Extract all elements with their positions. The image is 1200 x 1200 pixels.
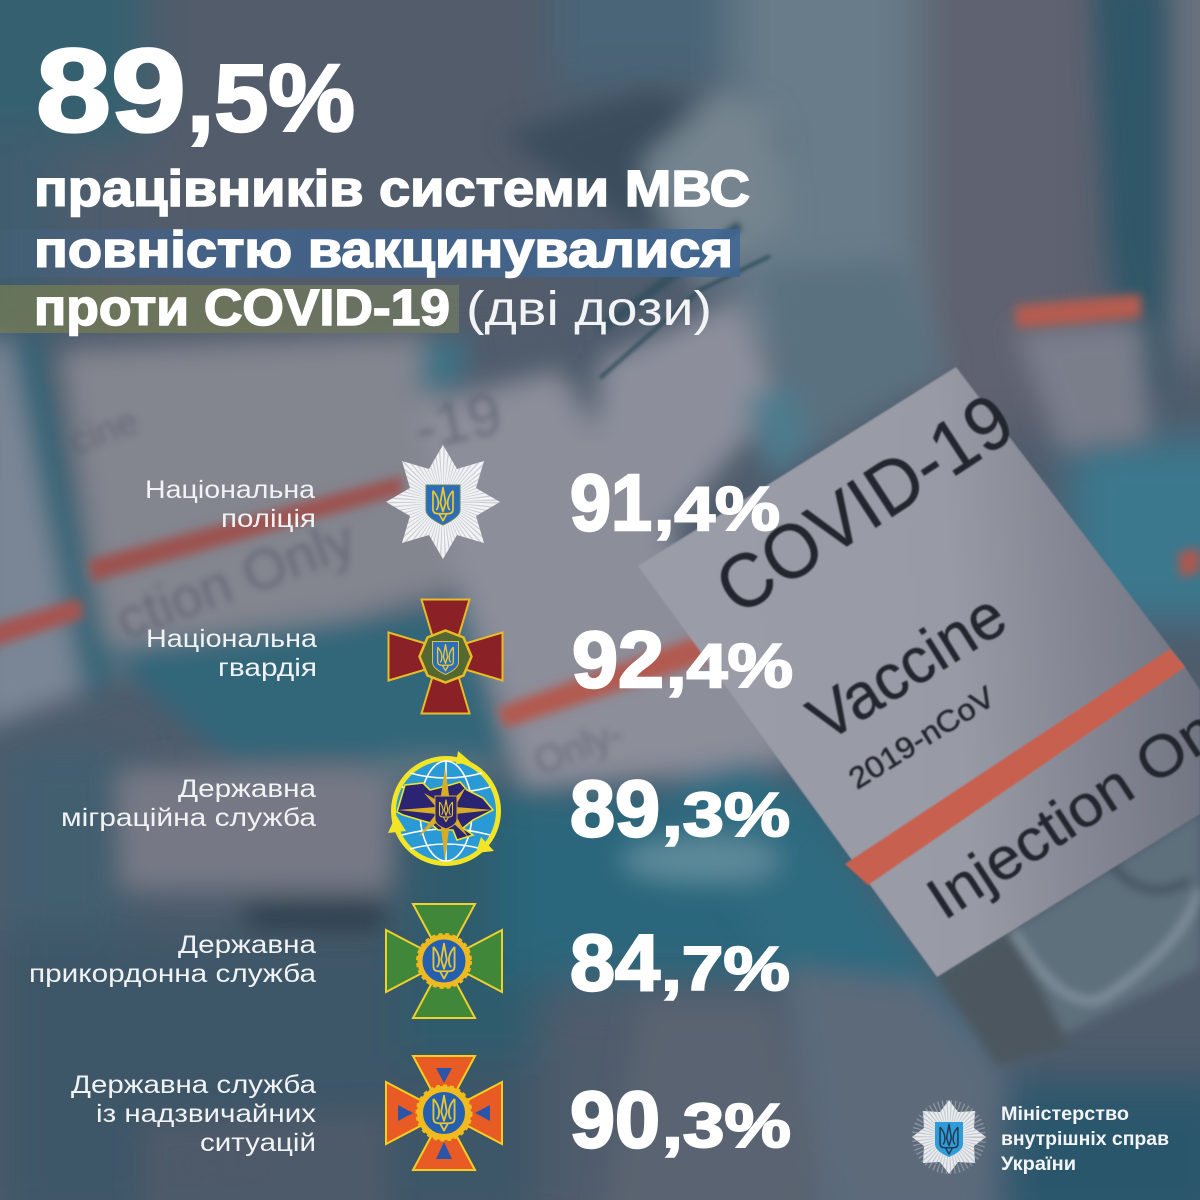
label — [71, 1071, 317, 1157]
value: ,4% — [666, 632, 793, 701]
value — [570, 458, 780, 547]
value — [570, 764, 790, 853]
ministry name — [1001, 1104, 1169, 1175]
vial label text: COVID-19 — [701, 378, 1028, 631]
row: Державна служба із надзвичайних ситуацій — [71, 1056, 791, 1170]
ghost text on blurred vials — [64, 379, 628, 1192]
highlight band: line 3 — [0, 285, 459, 333]
value: 90 — [570, 1075, 660, 1164]
value — [570, 918, 790, 1007]
label — [145, 476, 316, 533]
ghost text on blurred vials: -19 — [409, 379, 508, 463]
headline percentage: ,5% — [187, 45, 355, 152]
value — [572, 615, 793, 704]
label: гвардія — [218, 654, 317, 682]
neck of main vial — [600, 256, 770, 378]
ministry name: внутрішніх справ — [1001, 1129, 1169, 1150]
label: міграційна служба — [61, 804, 316, 832]
label: Державна — [178, 775, 316, 803]
icon: ministry star — [912, 1100, 986, 1174]
glass bottle base of main vial — [937, 814, 1200, 1067]
headline text — [34, 160, 750, 336]
ghost text on blurred vials: ction Only — [108, 507, 363, 651]
icon: emergency service cross — [386, 1056, 502, 1170]
value: 89 — [570, 764, 660, 853]
vial label text: 2019-nCoV — [843, 681, 1001, 796]
value: 91 — [570, 458, 652, 547]
value: ,4% — [654, 475, 780, 544]
row: Національна гвардія — [146, 600, 793, 714]
value: ,3% — [662, 1092, 791, 1161]
label: Державна служба — [71, 1071, 316, 1099]
vial label text — [701, 378, 1200, 932]
headline note: (дві дози) — [466, 283, 712, 336]
value: 92 — [572, 615, 664, 704]
headline text: повністю вакцинувалися — [34, 221, 733, 278]
value: ,3% — [662, 781, 790, 850]
value: 84 — [570, 918, 661, 1007]
icon: migration service globe — [388, 751, 498, 864]
ghost text on blurred vials: cine — [64, 400, 144, 463]
ministry logo and name — [912, 1100, 1169, 1175]
main vial label — [638, 367, 1200, 977]
vial label text: Vaccine — [795, 578, 1018, 755]
ministry name: Міністерство — [1001, 1104, 1129, 1125]
value: ,7% — [661, 935, 790, 1004]
icon: border service cross — [386, 904, 502, 1018]
label: Національна — [146, 625, 317, 653]
label: із надзвичайних — [96, 1100, 317, 1128]
row: Державна прикордонна служба — [29, 904, 790, 1018]
label — [29, 931, 316, 988]
highlight band: line 2 — [0, 229, 740, 277]
icon: national guard cross — [388, 600, 502, 714]
value — [570, 1075, 791, 1164]
headline percentage — [36, 25, 355, 157]
row: Національна поліція — [145, 445, 780, 559]
label — [61, 775, 316, 832]
red vial stripes — [0, 294, 1200, 728]
label: Національна — [145, 476, 315, 504]
ghost text on blurred vials: Only- — [529, 713, 628, 783]
label: Державна — [178, 931, 316, 959]
label: прикордонна служба — [29, 960, 316, 988]
headline text: працівників системи МВС — [34, 160, 750, 217]
headline text: проти COVID-19 — [34, 279, 450, 336]
ghost text on blurred vials: D-19 — [170, 1138, 268, 1192]
row: Державна міграційна служба — [61, 751, 790, 864]
headline percentage: 89 — [36, 25, 186, 157]
label: ситуацій — [200, 1129, 316, 1157]
ministry name: України — [1001, 1154, 1076, 1175]
icon: police star — [386, 445, 500, 559]
label — [146, 625, 317, 682]
label: поліція — [221, 505, 316, 533]
